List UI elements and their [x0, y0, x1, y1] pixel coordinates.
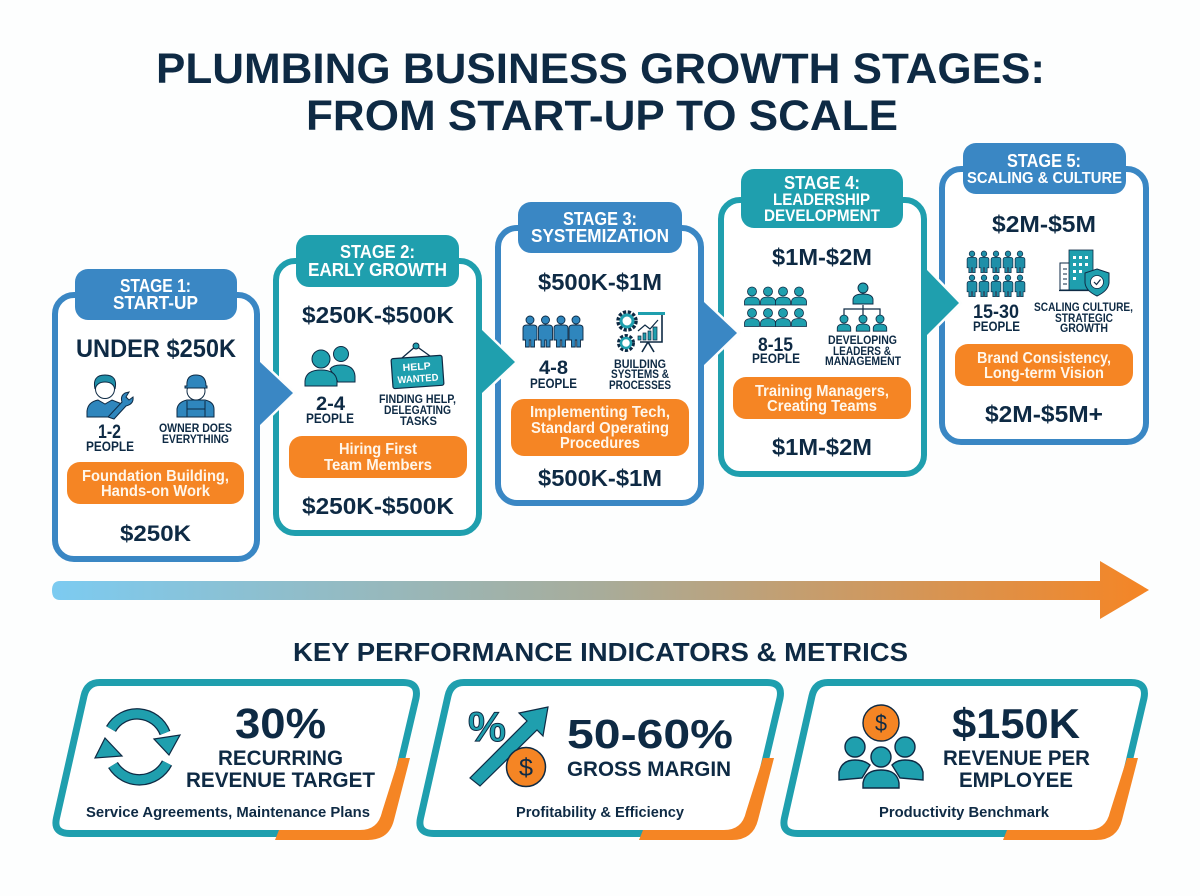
metric: 50-60%: 50-60% [567, 711, 733, 757]
stage 5 focus: Long-term Vision [984, 365, 1104, 382]
stage 2 role [379, 394, 456, 428]
metric label [186, 747, 375, 792]
stage 4 role: DEVELOPING [828, 335, 897, 347]
icon: team and coin [839, 705, 923, 788]
panel: stage 3 [498, 202, 701, 503]
stage 5 role: SCALING CULTURE, [1034, 302, 1133, 314]
stage 5 header: STAGE 5: [1007, 151, 1081, 171]
stage 2 focus: Team Members [324, 457, 432, 474]
stage 3 focus: Standard Operating [531, 420, 669, 437]
metric label: REVENUE TARGET [186, 769, 375, 792]
stage 3 revenue: $500K-$1M [538, 269, 662, 295]
metric: $150K: $150K [952, 700, 1080, 747]
icon: building with shield [1059, 250, 1109, 296]
stage 1 focus: Hands-on Work [101, 483, 210, 500]
metric label: EMPLOYEE [959, 769, 1073, 792]
stage 1 focus: Foundation Building, [82, 468, 229, 485]
stage 4 role: LEADERS & [833, 346, 891, 358]
stage 3 team size: PEOPLE [530, 376, 577, 391]
title: FROM START-UP TO SCALE [306, 92, 898, 140]
stage 5 revenue: $2M-$5M [992, 211, 1096, 237]
stage 3 role: BUILDING [614, 359, 666, 371]
metric note: Service Agreements, Maintenance Plans [86, 805, 370, 821]
stage 5 header [963, 143, 1126, 194]
stage 5 role: STRATEGIC [1055, 313, 1113, 325]
stage 5 team size [973, 302, 1020, 334]
stage 1 team size: PEOPLE [86, 439, 134, 454]
stage 3 header [518, 202, 682, 253]
stage 2 focus: Hiring First [339, 441, 417, 458]
title [156, 45, 1045, 140]
stage 5 header: SCALING & CULTURE [967, 170, 1122, 187]
title: PLUMBING BUSINESS GROWTH STAGES: [156, 45, 1045, 93]
arrow: stage 1 to stage 2 [258, 362, 293, 425]
metric label: RECURRING [218, 747, 343, 770]
stage 4 role [825, 335, 901, 368]
stage 2 team size [306, 394, 354, 426]
stage 3 team size [530, 358, 577, 391]
metric: 30%: 30% [235, 700, 326, 748]
icon: worker with wrench [87, 375, 133, 419]
icon: gears and chart board [618, 312, 665, 352]
stage 4 focus: Creating Teams [767, 398, 877, 415]
stage 2 header: STAGE 2: [340, 242, 415, 262]
stage 3 header: STAGE 3: [563, 209, 637, 229]
stage 4 revenue: $1M-$2M [772, 244, 872, 270]
stage 5 target: $2M-$5M+ [985, 401, 1103, 427]
stage 1 focus [67, 462, 244, 504]
icon: ten people [967, 251, 1025, 297]
panel: stage 4 [721, 169, 924, 474]
arrow: stage 3 to stage 4 [702, 302, 737, 365]
stage 4 focus: Training Managers, [755, 383, 889, 400]
stage 2 target: $250K-$500K [302, 493, 454, 519]
stage 5 focus [955, 344, 1133, 386]
stage 1 header: START-UP [113, 293, 198, 313]
stage 2 header: EARLY GROWTH [308, 260, 447, 280]
stage 1 team size: 1-2 [98, 422, 121, 443]
stage 2 team size: PEOPLE [306, 411, 354, 426]
icon: help wanted sign [391, 343, 444, 389]
stage 1 role: OWNER DOES [159, 423, 232, 435]
stage 1 header [75, 269, 237, 320]
stage 1 role [159, 423, 232, 446]
stage 4 header [741, 169, 903, 228]
stage 2 team size: 2-4 [316, 394, 345, 415]
arrow: stage 2 to stage 3 [480, 330, 515, 393]
arrow: stage 4 to stage 5 [925, 270, 959, 335]
stage 4 header: STAGE 4: [784, 173, 860, 193]
stage 4 team size: 8-15 [758, 335, 793, 356]
icon: team and coin: $ [875, 710, 887, 736]
stage 5 role: GROWTH [1060, 323, 1108, 335]
stage 3 role [609, 359, 671, 392]
stage 2 role: TASKS [400, 416, 437, 428]
stage 1 header: STAGE 1: [120, 276, 191, 296]
icon: four people [523, 316, 583, 347]
panel: KPI revenue per employee [784, 682, 1144, 840]
arrow: growth progression [52, 561, 1149, 619]
metric label [943, 747, 1090, 792]
stage 3 team size: 4-8 [539, 358, 568, 379]
stage 1 target: $250K [120, 521, 191, 546]
icon: two people [305, 346, 355, 386]
stage 3 role: SYSTEMS & [611, 369, 669, 381]
icon: org chart [837, 283, 887, 331]
stage 5 role [1034, 302, 1133, 335]
metric note: Profitability & Efficiency [516, 805, 684, 821]
metric note: Productivity Benchmark [879, 805, 1050, 821]
icon: help wanted sign: HELP [402, 361, 431, 374]
stage 1 role: EVERYTHING [162, 434, 229, 446]
stage 2 header [296, 235, 459, 287]
stage 1 team size [86, 422, 134, 454]
icon: help wanted sign: WANTED [397, 373, 439, 386]
stage 3 focus: Procedures [560, 435, 640, 452]
panel: KPI recurring revenue [56, 682, 416, 840]
stage 3 target: $500K-$1M [538, 465, 662, 491]
stage 2 revenue: $250K-$500K [302, 302, 454, 328]
icon: percent, arrow and coin: $ [519, 754, 533, 782]
stage 4 team size: PEOPLE [752, 351, 800, 366]
stage 2 role: DELEGATING [384, 405, 451, 417]
icon: recurring arrows [95, 714, 180, 780]
stage 5 team size: PEOPLE [973, 319, 1020, 334]
panel: stage 5 [942, 143, 1146, 442]
icon: eight people [744, 287, 806, 326]
stage 2 role: FINDING HELP, [379, 394, 456, 406]
panel: stage 1 [55, 269, 257, 559]
stage 3 focus: Implementing Tech, [530, 404, 670, 421]
stage 3 header: SYSTEMIZATION [531, 226, 669, 246]
stage 4 header: LEADERSHIP [773, 191, 870, 209]
stage 4 focus [733, 377, 911, 419]
stage 5 focus: Brand Consistency, [977, 350, 1111, 367]
stage 2 focus [289, 436, 467, 478]
icon: percent, arrow and coin: % [468, 703, 506, 750]
stage 4 target: $1M-$2M [772, 434, 872, 460]
stage 3 focus [511, 399, 689, 456]
icon: owner in hard hat [177, 375, 214, 417]
metric label: REVENUE PER [943, 747, 1090, 770]
stage 3 role: PROCESSES [609, 380, 671, 392]
heading: KPIs: KEY PERFORMANCE INDICATORS & METRICS [293, 637, 908, 667]
metric label: GROSS MARGIN [567, 758, 731, 781]
panel: stage 2 [276, 235, 479, 533]
stage 5 team size: 15-30 [973, 302, 1019, 323]
stage 4 role: MANAGEMENT [825, 356, 901, 368]
stage 1 revenue: UNDER $250K [76, 335, 236, 363]
icon: percent, arrow and coin [468, 703, 548, 786]
panel: KPI gross margin [420, 682, 780, 840]
stage 4 header: DEVELOPMENT [764, 207, 880, 225]
stage 4 team size [752, 335, 800, 366]
